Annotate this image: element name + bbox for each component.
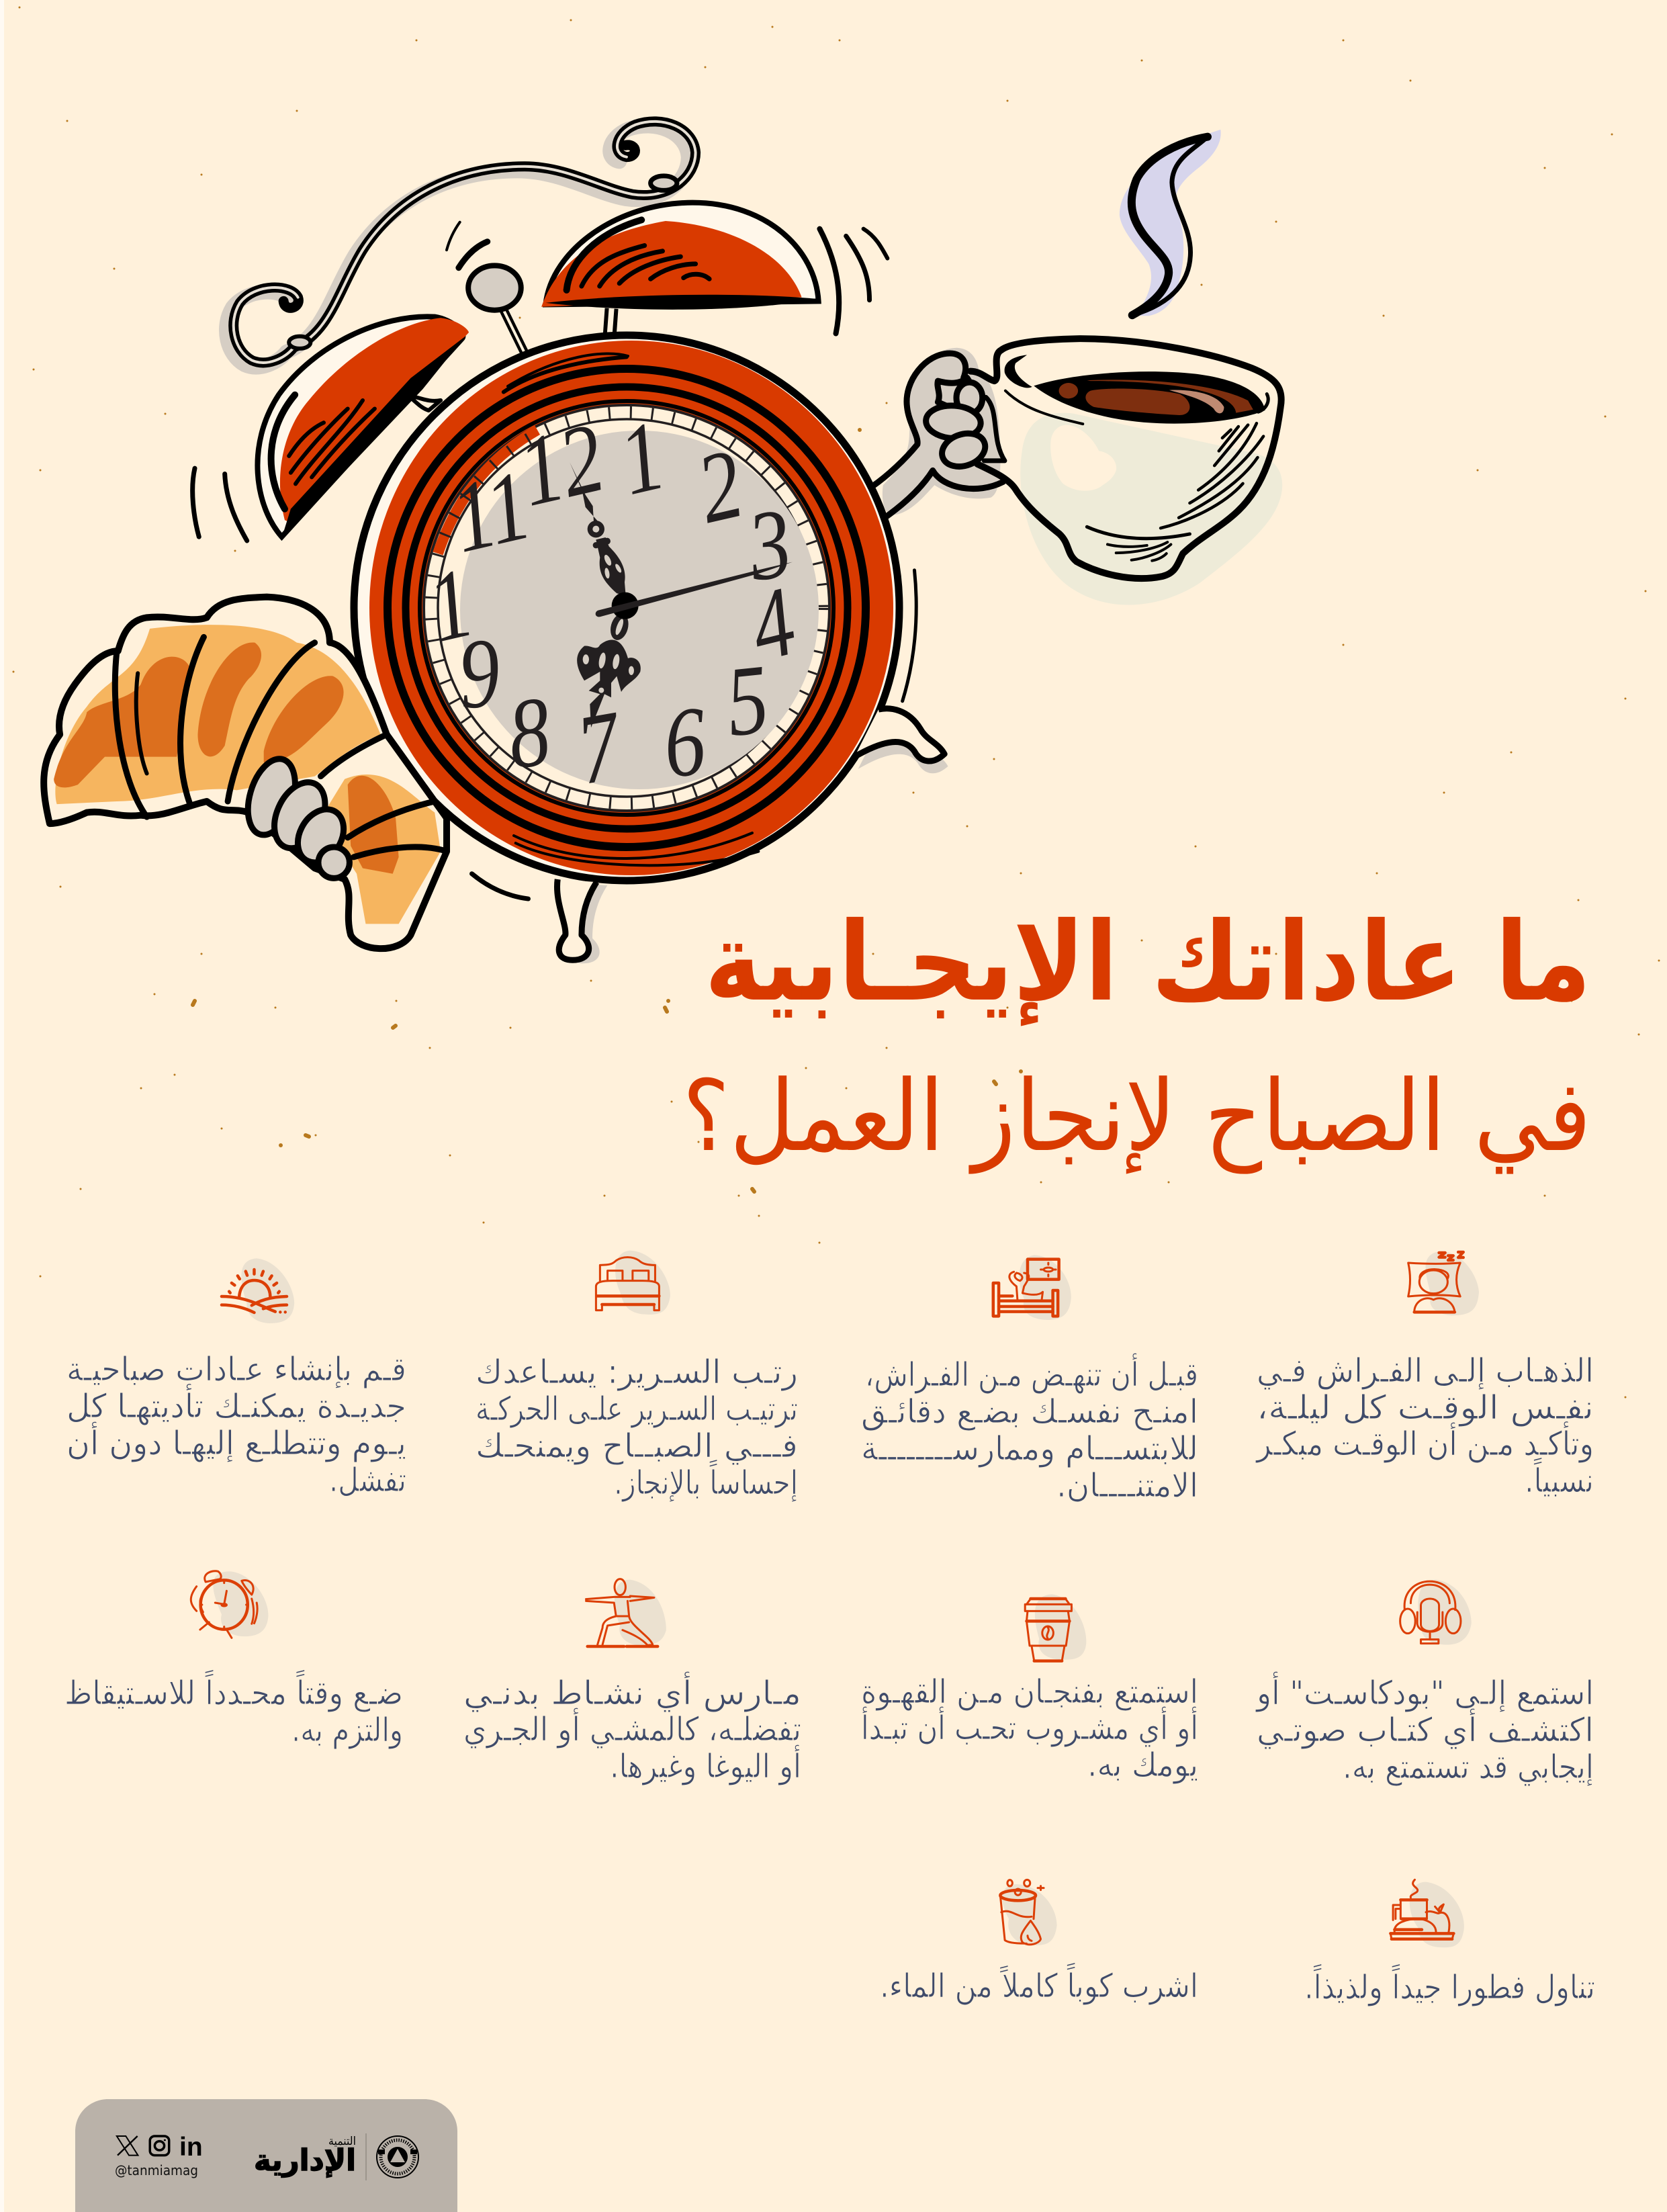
text: الامتنــــان. xyxy=(1056,1466,1198,1505)
icon: person waking in bed xyxy=(993,1255,1071,1320)
text xyxy=(66,1350,406,1499)
icon: sunrise xyxy=(222,1258,294,1323)
clock numerals: 2 xyxy=(688,428,752,545)
text: اكتشـف أي كتـاب صوتـي xyxy=(1257,1708,1594,1749)
icon: takeaway coffee cup xyxy=(1025,1594,1086,1661)
text xyxy=(64,1669,403,1749)
text: تفشل. xyxy=(329,1461,406,1499)
text: ترتيـب السـرير علـى الحركـة xyxy=(476,1390,798,1428)
text: تناول فطورا جيداً ولذيذاً. xyxy=(1304,1963,1595,2006)
item: new morning habits xyxy=(66,1258,406,1499)
text: يومك به. xyxy=(1087,1746,1198,1784)
subtitle: في الصباح لإنجاز العمل؟ xyxy=(682,1059,1591,1174)
text: والتزم به. xyxy=(291,1711,403,1749)
text xyxy=(476,1353,798,1503)
clock legs xyxy=(557,709,948,963)
text xyxy=(1255,1671,1594,1787)
clock body xyxy=(354,335,899,881)
text xyxy=(463,1671,801,1785)
text xyxy=(861,1353,1198,1505)
clock numerals: 6 xyxy=(661,686,709,799)
icon: sleeping person xyxy=(1408,1251,1479,1315)
clock numerals: 1 xyxy=(610,400,674,517)
item: water xyxy=(880,1879,1198,2005)
croissant held by a hand xyxy=(44,597,447,948)
clock hands xyxy=(570,462,793,727)
text: فـــي الصبــاح ويمنحـك xyxy=(476,1427,798,1465)
right bell xyxy=(541,203,819,334)
item: coffee xyxy=(861,1594,1198,1784)
logo: institute seal xyxy=(377,2136,418,2178)
clock handle and bell hammer xyxy=(226,122,696,367)
text: قبـل أن تنهـض مـن الفـراش، xyxy=(865,1353,1198,1394)
item: podcast xyxy=(1255,1580,1594,1787)
illustration: alarm clock character with croissant and coffee cup xyxy=(44,122,1282,963)
item: make the bed xyxy=(476,1251,798,1503)
icon: yoga pose xyxy=(586,1579,666,1646)
item: wake-up time xyxy=(64,1571,403,1749)
text: امنـح نفسـك بضـع دقائـق xyxy=(861,1392,1198,1431)
item: before getting up xyxy=(861,1255,1198,1505)
item: breakfast xyxy=(1304,1879,1595,2006)
text: إيجابي قد تستمتع به. xyxy=(1343,1748,1594,1787)
clock numerals: 4 xyxy=(739,566,805,682)
item: bedtime xyxy=(1255,1251,1594,1500)
icon: bed xyxy=(596,1251,670,1315)
text: مـارس أي نشـاط بدنـي xyxy=(463,1671,801,1712)
clock numerals: 5 xyxy=(721,644,774,758)
text: استمع إلـى "بودكاسـت" أو xyxy=(1255,1671,1594,1713)
text xyxy=(1255,1352,1594,1500)
icon: X xyxy=(117,2136,138,2156)
icon: glass of water xyxy=(1000,1879,1057,1945)
handle: @tanmiamag xyxy=(115,2162,198,2178)
clock numerals: 1 xyxy=(418,547,483,664)
steam xyxy=(1120,130,1221,316)
text: أو أي مشـروب تحـب أن تبـدأ xyxy=(861,1706,1198,1747)
item: exercise xyxy=(463,1579,801,1785)
text: نسبياً. xyxy=(1525,1457,1594,1500)
clock numerals: 3 xyxy=(741,488,798,603)
arm, fist and coffee cup xyxy=(872,339,1282,605)
text: رتـب السـرير: يسـاعدك xyxy=(476,1353,798,1391)
text: قـم بإنشاء عـادات صباحيـة xyxy=(66,1350,406,1389)
text: إحساساً بالإنجاز. xyxy=(614,1459,798,1503)
logo: magazine name: التنمية xyxy=(328,2135,356,2148)
text xyxy=(861,1673,1198,1784)
text: وتأكـد مـن أن الوقـت مبكـر xyxy=(1255,1421,1594,1463)
icon: ringing alarm clock xyxy=(191,1571,268,1638)
left bell xyxy=(257,316,469,538)
clock numerals: 9 xyxy=(455,617,504,730)
text: ضـع وقتاً محـدداً للاسـتيقاظ xyxy=(64,1669,403,1712)
clock numerals: 12 xyxy=(509,402,614,528)
icon: LinkedIn: in xyxy=(179,2133,203,2162)
logo: magazine name: الإدارية xyxy=(254,2143,356,2178)
icon: headset and microphone xyxy=(1400,1580,1472,1645)
text: اشرب كوباً كاملاً من الماء. xyxy=(880,1962,1198,2005)
text: جديـدة يمكنـك تأديتهـا كل xyxy=(66,1383,406,1425)
icon: Instagram xyxy=(150,2136,169,2156)
text: أو اليوغا وغيرها. xyxy=(610,1744,801,1785)
footer panel xyxy=(75,2099,457,2212)
icon: breakfast plate xyxy=(1390,1879,1464,1947)
text: نفـس الوقـت كل ليلـة، xyxy=(1257,1388,1594,1427)
clock numerals: 11 xyxy=(442,449,540,574)
clock numerals xyxy=(418,400,805,806)
text: يـوم وتتطلـع إليهـا دون أن xyxy=(66,1421,406,1463)
text: الذهـاب إلـى الفـراش فـي xyxy=(1257,1352,1594,1390)
clock numerals: 7 xyxy=(569,690,631,806)
text: للابتســـام وممارســــــــة xyxy=(861,1429,1198,1468)
motion lines xyxy=(193,222,916,899)
text: استمتع بفنجـان مـن القهـوة xyxy=(861,1673,1198,1711)
text: تفضلـه، كالمشـي أو الجـري xyxy=(463,1708,801,1749)
clock numerals: 8 xyxy=(503,676,555,790)
